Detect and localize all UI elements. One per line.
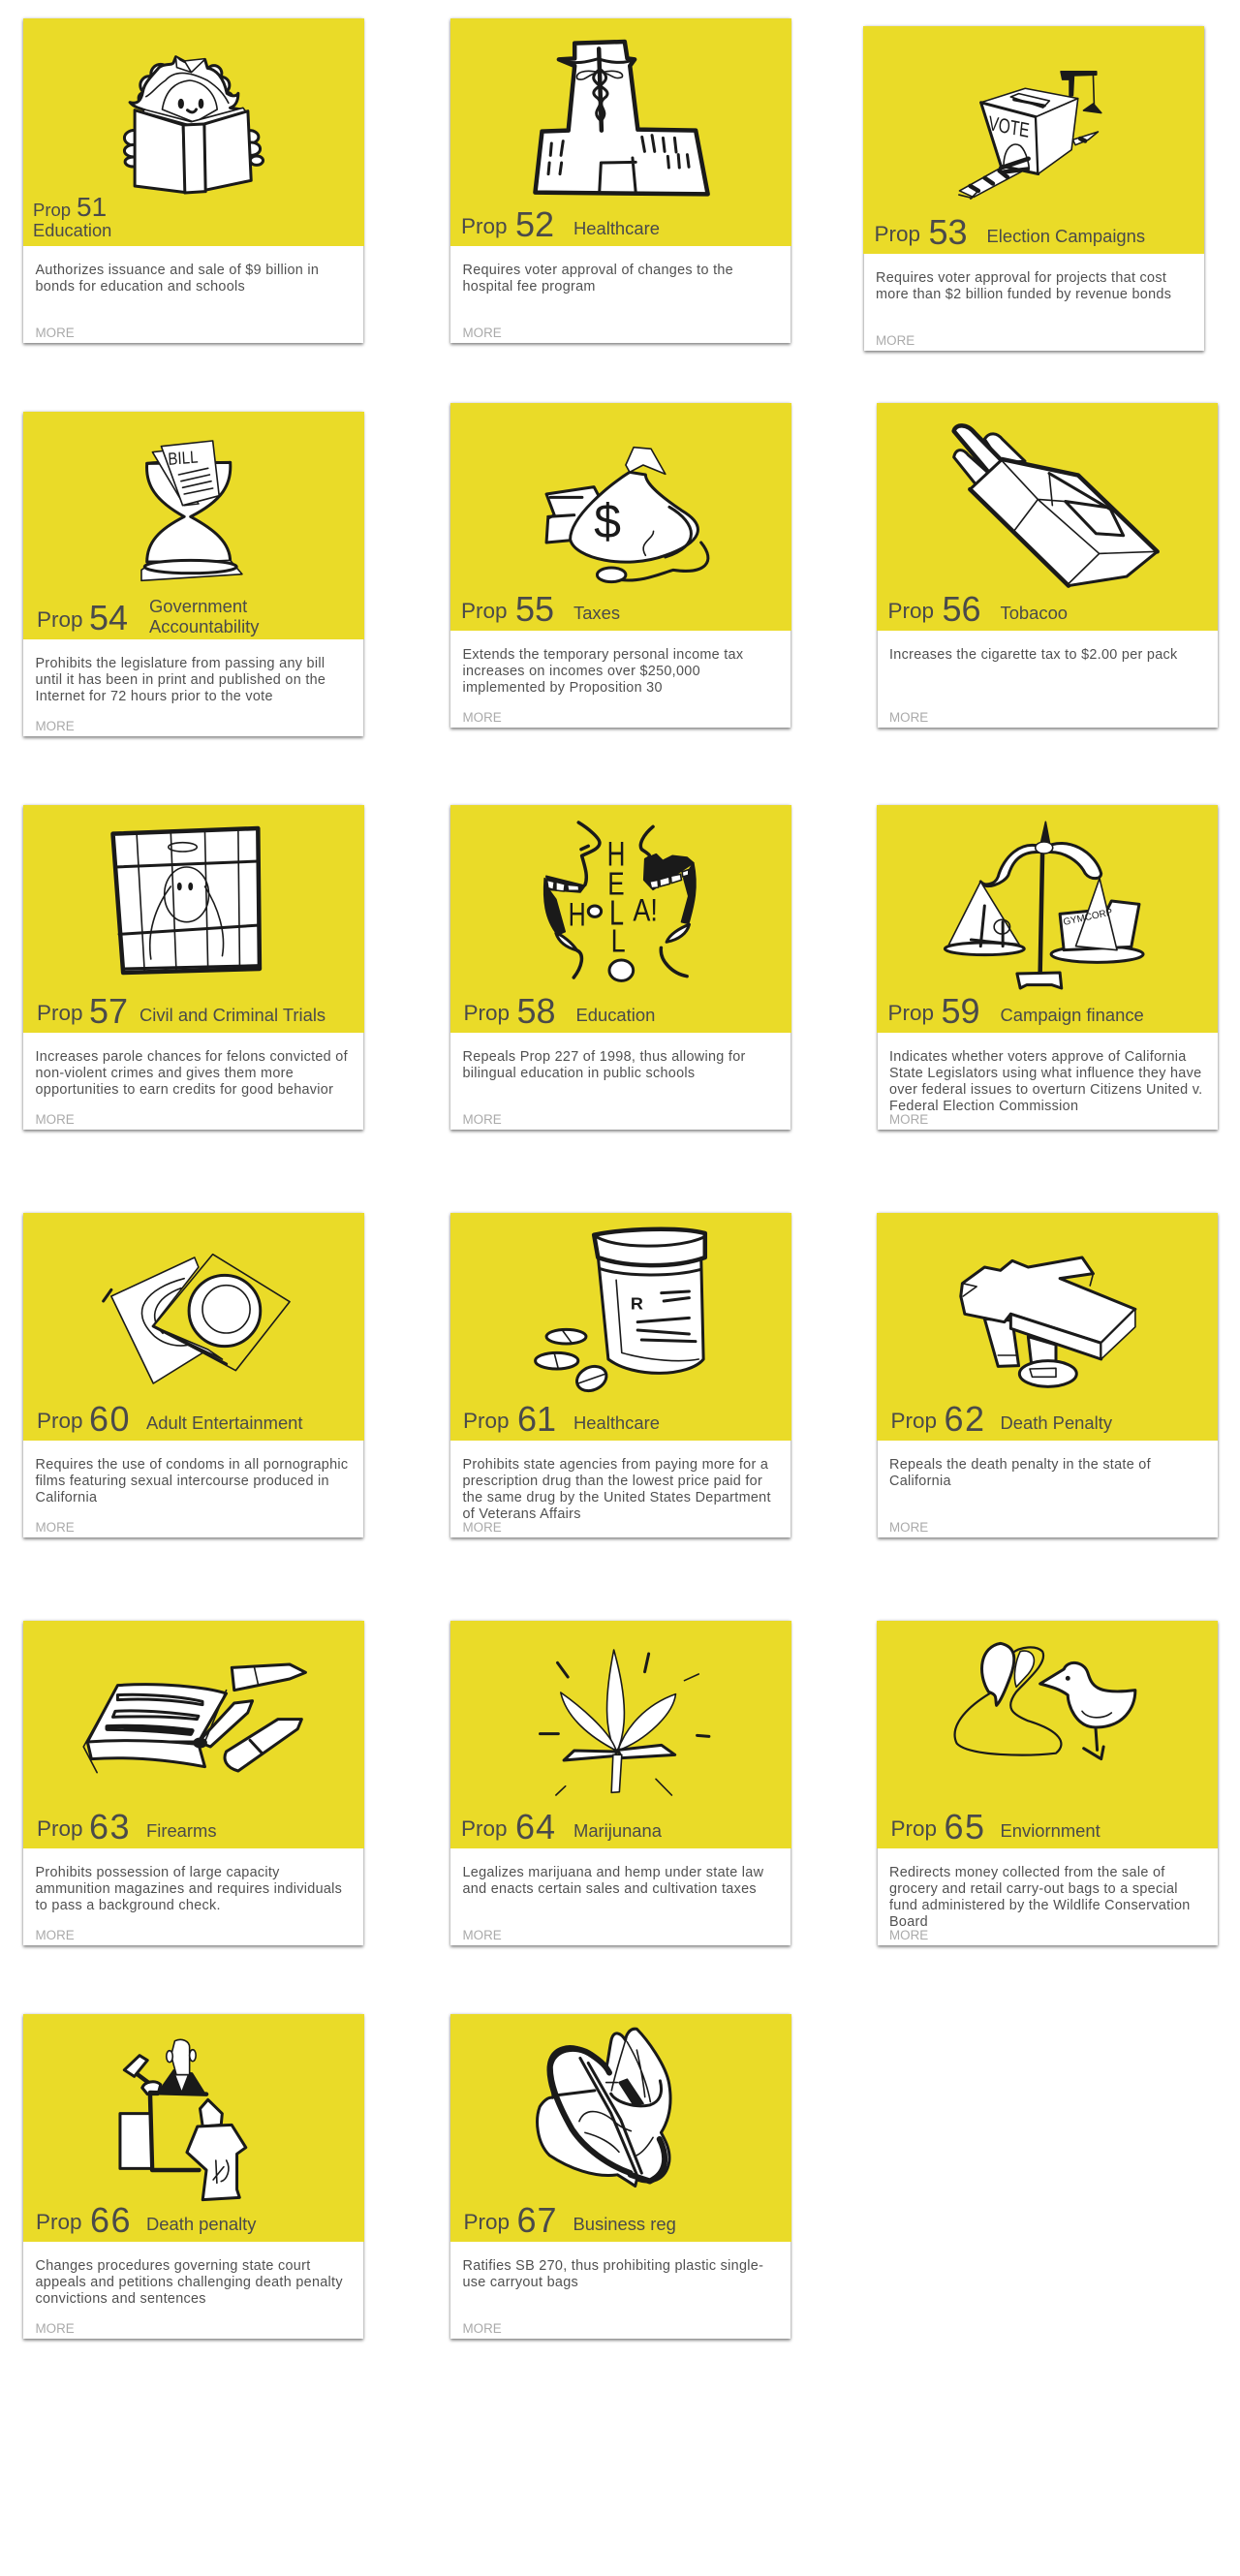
description: Prohibits the legislature from passing any bill	[35, 656, 325, 671]
description: hospital fee program	[463, 279, 596, 295]
more link: MORE	[35, 1112, 75, 1127]
heading: 61	[517, 1399, 556, 1438]
heading	[37, 1806, 217, 1847]
heading: Prop	[37, 607, 83, 632]
heading: Campaign finance	[1000, 1005, 1144, 1025]
description: Ratifies SB 270, thus prohibiting plastic single-	[463, 2258, 763, 2274]
heading: Enviornment	[1000, 1820, 1100, 1841]
heading: 66	[90, 2199, 132, 2240]
icon: marijuana leaf	[539, 1649, 711, 1796]
icon: hourglass with bill	[140, 440, 243, 581]
description: Authorizes issuance and sale of $9 billion in	[35, 263, 319, 278]
description: Prohibits possession of large capacity	[35, 1865, 280, 1880]
description: implemented by Proposition 30	[463, 680, 663, 696]
description: increases on incomes over $250,000	[463, 664, 700, 679]
heading: Prop	[463, 2210, 510, 2234]
heading	[23, 2198, 363, 2239]
heading	[878, 1805, 1217, 1846]
description: Legalizes marijuana and hemp under state law	[463, 1865, 763, 1880]
description: non-violent crimes and gives them more	[35, 1066, 294, 1081]
heading: Prop	[887, 599, 934, 623]
icon: ballot box: VOTE	[987, 111, 1031, 141]
heading: 51	[77, 192, 107, 222]
more link: MORE	[463, 1520, 502, 1535]
more link: MORE	[35, 1520, 75, 1535]
description: Repeals the death penalty in the state of	[889, 1457, 1151, 1473]
panel: prop 52	[450, 18, 790, 343]
heading: 60	[89, 1399, 131, 1438]
icon: faces saying hello and hola	[542, 821, 697, 982]
description: grocery and retail carry-out bags to a special	[889, 1881, 1178, 1897]
icon: girl reading book	[122, 55, 265, 194]
icon: fallen cross	[959, 1256, 1137, 1388]
heading: 63	[89, 1806, 131, 1847]
description: over federal issues to overturn Citizens United v.	[889, 1082, 1202, 1098]
heading	[874, 211, 1145, 252]
heading: Prop	[36, 2210, 82, 2234]
heading: Education	[33, 220, 111, 240]
heading: 58	[517, 990, 556, 1031]
panel: prop 54	[23, 412, 363, 736]
description: prescription drug than the lowest price paid for	[463, 1474, 762, 1489]
heading	[463, 990, 655, 1031]
heading: Business reg	[574, 2214, 676, 2234]
heading: 59	[942, 990, 980, 1031]
icon: faces saying hello and hola: L	[610, 924, 625, 959]
more link: MORE	[463, 1112, 502, 1127]
heading: Prop	[461, 1816, 508, 1841]
heading: 57	[89, 990, 128, 1031]
heading	[461, 589, 620, 628]
panel: prop 65	[878, 1621, 1217, 1945]
panel: prop 53	[864, 26, 1203, 351]
description: bilingual education in public schools	[463, 1066, 695, 1081]
description: Board	[889, 1914, 928, 1930]
panel: prop 61	[450, 1213, 790, 1537]
heading: Prop	[463, 1409, 510, 1433]
panel: prop 64	[450, 1621, 790, 1945]
heading	[461, 1806, 662, 1847]
description	[463, 1865, 787, 1898]
panel: prop 58	[450, 805, 790, 1130]
heading: Prop	[37, 1409, 83, 1433]
icon: plastic bag tied	[450, 2014, 790, 2242]
description: fund administered by the Wildlife Conservation	[889, 1898, 1191, 1913]
heading: Healthcare	[574, 218, 660, 238]
description: Changes procedures governing state court	[35, 2258, 310, 2274]
heading	[461, 203, 660, 244]
description	[35, 2258, 360, 2308]
heading: Prop	[891, 1409, 937, 1433]
description: bonds for education and schools	[35, 279, 245, 295]
description: Increases parole chances for felons convicted of	[35, 1049, 348, 1065]
panel: prop 67	[450, 2014, 790, 2339]
icon: faces saying hello and hola: H	[606, 834, 625, 873]
description: Extends the temporary personal income tax	[463, 647, 743, 663]
more link: MORE	[889, 1520, 928, 1535]
more link: MORE	[889, 1928, 928, 1942]
heading	[887, 589, 1068, 628]
description	[35, 1457, 348, 1505]
heading: Prop	[33, 200, 71, 220]
heading: Prop	[887, 1001, 934, 1025]
heading: Prop	[461, 214, 508, 238]
heading: Election Campaigns	[986, 226, 1145, 246]
heading: Adult Entertainment	[146, 1412, 303, 1433]
panel: prop 59	[878, 805, 1217, 1130]
heading: Marijunana	[574, 1820, 662, 1841]
heading: 62	[944, 1399, 986, 1438]
description: the same drug by the United States Department	[463, 1490, 771, 1505]
description: California	[889, 1474, 951, 1489]
icon: pill bottle	[534, 1226, 707, 1393]
description: convictions and sentences	[35, 2291, 206, 2307]
icon: scales of justice	[944, 822, 1145, 990]
panel: prop 51	[23, 18, 363, 343]
panel: prop 62	[878, 1213, 1217, 1537]
description	[463, 2258, 787, 2291]
description: California	[35, 1490, 97, 1505]
heading	[463, 1399, 660, 1438]
icon: faces saying hello and hola: L	[608, 893, 624, 932]
heading: 53	[928, 211, 968, 252]
icon: ballot box	[958, 71, 1102, 200]
icon: faces saying hello and hola: E	[607, 867, 624, 902]
icon: faces saying hello and hola: A!	[633, 893, 657, 928]
more link: MORE	[35, 1928, 75, 1942]
heading: Death penalty	[146, 2214, 256, 2234]
heading: Accountability	[149, 616, 259, 636]
heading: 52	[515, 203, 554, 244]
description	[35, 1049, 348, 1098]
icon: cigarette pack	[951, 423, 1160, 588]
description: of Veterans Affairs	[463, 1506, 581, 1522]
heading: 64	[515, 1806, 556, 1847]
heading: Prop	[891, 1816, 937, 1841]
panel: prop 57	[23, 805, 363, 1130]
panel: prop 55	[450, 403, 790, 728]
more link: MORE	[463, 710, 502, 725]
description	[463, 1049, 746, 1081]
panel: prop 63	[23, 1621, 363, 1945]
panel: prop 66	[23, 2014, 363, 2339]
heading	[887, 990, 1144, 1031]
more link: MORE	[876, 333, 914, 348]
heading	[37, 596, 260, 637]
description: Prohibits state agencies from paying more for a	[463, 1457, 768, 1473]
description: until it has been in print and published on the	[35, 672, 326, 688]
description	[889, 1457, 1151, 1489]
description: Redirects money collected from the sale of	[889, 1865, 1165, 1880]
more link: MORE	[35, 326, 75, 340]
icon: hospital with caduceus	[533, 39, 710, 197]
heading	[33, 192, 111, 240]
more link: MORE	[35, 2321, 75, 2336]
heading: Healthcare	[574, 1412, 660, 1433]
more link: MORE	[889, 1112, 928, 1127]
heading: Prop	[874, 222, 920, 246]
heading: Civil and Criminal Trials	[140, 1005, 326, 1025]
heading	[891, 1399, 1112, 1438]
icon: magazine and bullets	[82, 1662, 307, 1773]
description: Repeals Prop 227 of 1998, thus allowing for	[463, 1049, 746, 1065]
more link: MORE	[463, 2321, 502, 2336]
icon: scales of justice: GYMCORP	[1063, 907, 1114, 928]
description	[889, 1049, 1202, 1114]
description: Requires voter approval for projects that cost	[876, 270, 1166, 286]
icon: judge and defendant	[23, 2014, 364, 2242]
description: Requires voter approval of changes to the	[463, 263, 733, 278]
description: Internet for 72 hours prior to the vote	[35, 689, 273, 704]
description: Requires the use of condoms in all pornographic	[35, 1457, 348, 1473]
more link: MORE	[463, 326, 502, 340]
description: use carryout bags	[463, 2275, 578, 2290]
icon: pill bottle: R	[630, 1293, 642, 1313]
panel: prop 60	[23, 1213, 363, 1537]
description: more than $2 billion funded by revenue bonds	[876, 287, 1171, 302]
description	[463, 647, 743, 696]
panel: prop 56	[878, 403, 1217, 728]
description	[35, 263, 319, 295]
description	[463, 263, 733, 295]
icon: prisoner behind bars	[110, 825, 262, 975]
heading: Education	[575, 1005, 655, 1025]
heading: Taxes	[574, 603, 620, 623]
more link: MORE	[35, 719, 75, 733]
icon: faces saying hello and hola: H	[568, 897, 585, 934]
heading: Tobacoo	[1000, 603, 1068, 623]
description: State Legislators using what influence they have	[889, 1066, 1201, 1081]
heading: 55	[515, 589, 554, 628]
heading: Firearms	[146, 1820, 217, 1841]
icon: money bag	[544, 446, 709, 583]
heading: Prop	[463, 1001, 510, 1025]
description: appeals and petitions challenging death penalty	[35, 2275, 343, 2290]
icon: condom wrappers	[102, 1254, 291, 1384]
description: Indicates whether voters approve of California	[889, 1049, 1187, 1065]
description	[889, 1865, 1214, 1931]
description	[876, 270, 1171, 302]
heading: Death Penalty	[1000, 1412, 1112, 1433]
icon: plastic bag and bird	[877, 1621, 1218, 1848]
more link: MORE	[463, 1928, 502, 1942]
description: ammunition magazines and requires individuals	[35, 1881, 342, 1897]
description: to pass a background check.	[35, 1898, 221, 1913]
heading	[450, 2198, 790, 2239]
more link: MORE	[889, 710, 928, 725]
heading: 65	[944, 1806, 986, 1847]
heading: Prop	[37, 1816, 83, 1841]
heading: Prop	[461, 599, 508, 623]
heading	[37, 990, 326, 1031]
heading: 54	[89, 597, 128, 637]
description: Federal Election Commission	[889, 1099, 1078, 1114]
heading: 56	[942, 589, 981, 628]
description	[35, 656, 326, 704]
description: and enacts certain sales and cultivation taxes	[463, 1881, 757, 1897]
icon: money bag: $	[594, 494, 621, 548]
heading: Government	[149, 596, 247, 616]
icon: hourglass with bill: BILL	[167, 447, 198, 469]
heading	[37, 1399, 303, 1438]
description: Increases the cigarette tax to $2.00 per pack	[889, 647, 1177, 663]
description	[35, 1865, 342, 1913]
heading: Prop	[37, 1001, 83, 1025]
description	[463, 1457, 771, 1522]
description: films featuring sexual intercourse produced in	[35, 1474, 329, 1489]
heading: 67	[517, 2199, 558, 2240]
description: opportunities to earn credits for good behavior	[35, 1082, 333, 1098]
